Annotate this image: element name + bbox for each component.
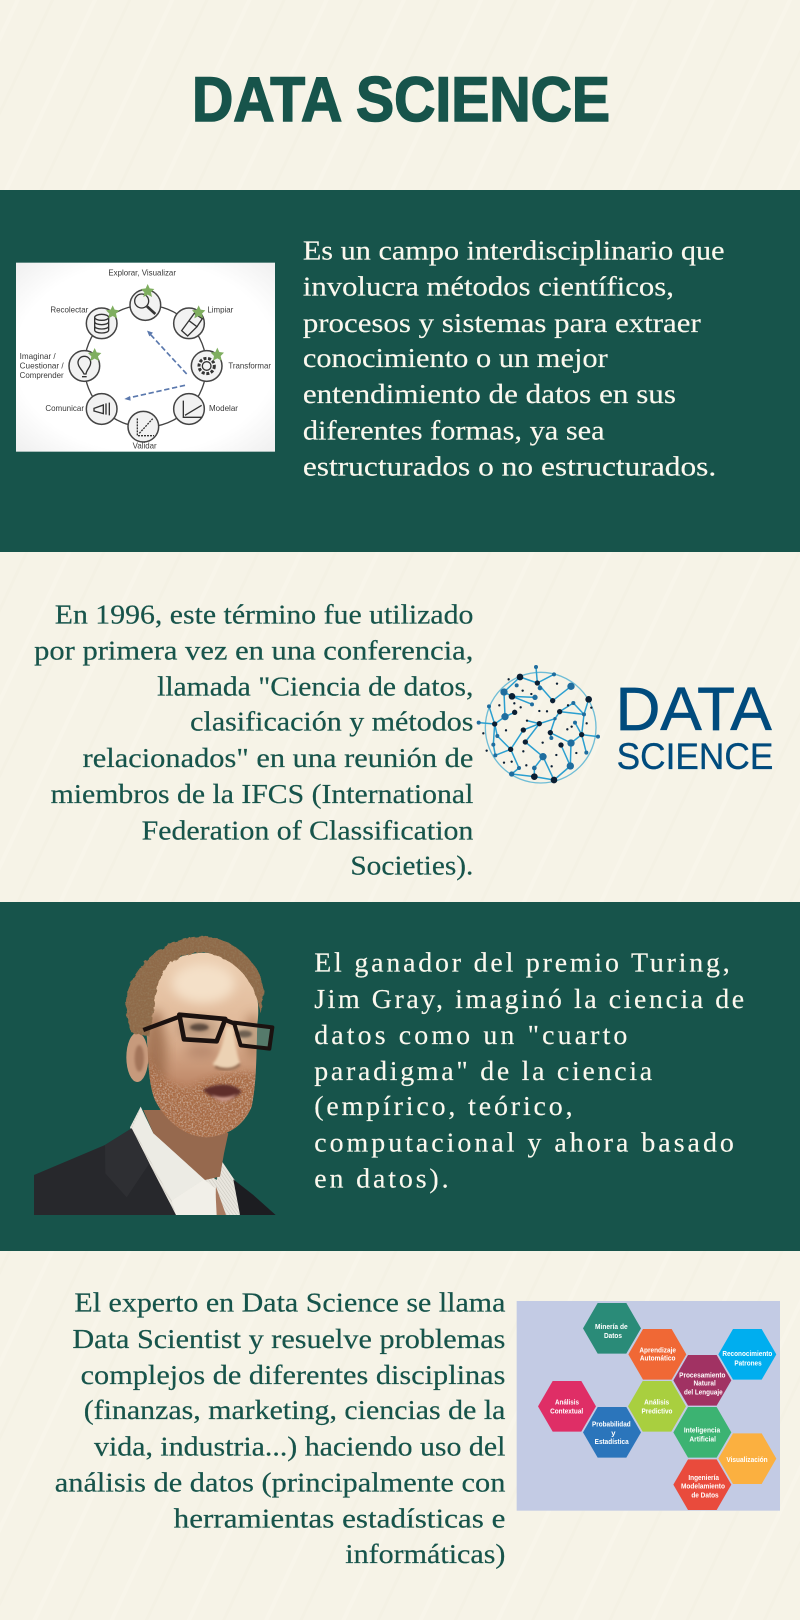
definition text [303, 235, 725, 482]
title: DATA SCIENCE [192, 65, 610, 135]
Jim Gray text: Jim Gray, imaginó la ciencia de [314, 984, 744, 1015]
hair [126, 936, 264, 1037]
definition text: conocimiento o un mejor [303, 343, 609, 374]
hexagon: Visualización [718, 1433, 776, 1484]
Jim Gray text: (empírico, teórico, [314, 1091, 573, 1122]
data scientist text: complejos de diferentes disciplinas [81, 1360, 505, 1391]
hexagon: Ingeniería Modelamiento de Datos: de Datos [691, 1490, 719, 1499]
Jim Gray text: datos como un "cuarto [314, 1020, 627, 1051]
panel: history [34, 599, 773, 881]
neck [143, 1110, 228, 1180]
hexagon: Probabilidad y Estadística: y [611, 1429, 616, 1438]
figure: disciplines hexagons [517, 1301, 780, 1511]
hexagon: Análisis Contextual: Contextual [550, 1407, 583, 1416]
cycle labels: Explorar, Visualizar [108, 268, 176, 277]
collar [133, 1109, 204, 1201]
hexagon: Procesamiento Natural del Lenguaje: del Lenguaje [684, 1387, 723, 1396]
hexagon: Probabilidad y Estadística: Estadística [595, 1437, 629, 1446]
data scientist text: herramientas estadísticas e [174, 1504, 505, 1535]
facial shading [143, 963, 262, 1097]
figure: data science cycle [16, 263, 275, 452]
history text: Federation of Classification [142, 815, 473, 846]
mouth [203, 1085, 242, 1100]
ear [126, 1033, 148, 1082]
data scientist text [55, 1288, 506, 1570]
green stars [88, 284, 224, 361]
cycle labels: Imaginar / [20, 352, 57, 361]
data scientist text: Data Scientist y resuelve problemas [72, 1324, 505, 1355]
hexagon: Minería de Datos: Minería de [595, 1322, 628, 1331]
hexagon: Probabilidad y Estadística: Probabilidad [592, 1420, 631, 1429]
Jim Gray text [314, 948, 744, 1195]
logo wordmark: SCIENCE [617, 735, 773, 777]
dashed arrows [128, 334, 187, 398]
cycle labels [20, 268, 271, 450]
cycle labels: Comprender [20, 371, 64, 380]
data scientist text: informáticas) [345, 1539, 505, 1570]
hexagon: Ingeniería Modelamiento de Datos: Modelamiento [681, 1482, 725, 1491]
hexagon: Inteligencia Artificial: Inteligencia [684, 1425, 721, 1434]
history text: clasificación y métodos [190, 707, 473, 738]
hexagon: Procesamiento Natural del Lenguaje: Natural [693, 1379, 716, 1388]
nose [213, 1027, 240, 1069]
hexagon: Análisis Predictivo [628, 1381, 686, 1432]
hexagon: Reconocimiento Patrones [718, 1329, 776, 1380]
hexagon: Ingeniería Modelamiento de Datos: Ingeniería [688, 1473, 720, 1482]
data scientist text: vida, industria...) haciendo uso del [94, 1431, 506, 1462]
panel: definition [0, 190, 800, 552]
portrait of Jim Gray [34, 936, 276, 1215]
Jim Gray text: El ganador del premio Turing, [314, 948, 730, 979]
history text [34, 599, 474, 881]
panel: Jim Gray [0, 902, 800, 1251]
hexagon: Reconocimiento Patrones: Patrones [734, 1358, 762, 1367]
Jim Gray text: paradigma" de la ciencia [314, 1056, 652, 1087]
hexagon: Visualización: Visualización [726, 1455, 768, 1464]
logo wordmark [616, 675, 773, 777]
definition text: involucra métodos científicos, [303, 272, 674, 303]
hexagon: Ingeniería Modelamiento de Datos [673, 1459, 731, 1510]
hexagon: Minería de Datos: Datos [604, 1331, 622, 1340]
hexagon: Aprendizaje Automático: Automático [640, 1354, 676, 1363]
data scientist text: El experto en Data Science se llama [74, 1288, 505, 1319]
hexagon: Inteligencia Artificial: Artificial [689, 1435, 716, 1444]
hexagon: Análisis Contextual: Análisis [555, 1398, 579, 1407]
hexagon: Minería de Datos [583, 1303, 641, 1354]
definition text: procesos y sistemas para extraer [303, 308, 702, 339]
Jim Gray text: computacional y ahora basado [314, 1127, 734, 1158]
hexagon: Aprendizaje Automático: Aprendizaje [639, 1346, 676, 1355]
cycle labels: Transformar [228, 361, 271, 370]
hexagon: Procesamiento Natural del Lenguaje [673, 1355, 731, 1406]
cycle labels: Comunicar [45, 404, 84, 413]
cycle labels: Recolectar [50, 305, 89, 314]
history text: miembros de la IFCS (International [51, 779, 474, 810]
Jim Gray text: en datos). [314, 1164, 449, 1195]
definition text: entendimiento de datos en sus [303, 379, 676, 410]
beard [148, 1062, 256, 1138]
eyes [190, 1024, 252, 1038]
glasses [143, 1015, 272, 1049]
logo: data science [477, 665, 773, 783]
data scientist text: (finanzas, marketing, ciencias de la [84, 1395, 505, 1426]
jacket [34, 1128, 176, 1215]
cycle labels: Limpiar [207, 305, 234, 314]
data scientist text: análisis de datos (principalmente con [55, 1467, 505, 1498]
shirt base [130, 1107, 242, 1215]
cycle labels: Validar [133, 441, 157, 450]
history text: por primera vez en una conferencia, [34, 635, 473, 666]
network globe [477, 665, 600, 783]
logo wordmark: DATA [616, 675, 772, 743]
history text: Societies). [350, 850, 473, 881]
hexagon: Aprendizaje Automático [628, 1329, 686, 1380]
history text: llamada "Ciencia de datos, [157, 672, 473, 703]
hexagon: Probabilidad y Estadística [583, 1407, 641, 1458]
definition text: estructurados o no estructurados. [303, 451, 716, 482]
definition text: Es un campo interdisciplinario que [303, 235, 725, 266]
panel: data scientist [55, 1288, 780, 1570]
hexagon: Procesamiento Natural del Lenguaje: Procesamiento [679, 1370, 726, 1379]
icons inside the cycle [78, 294, 214, 436]
hexagon: Análisis Predictivo: Predictivo [641, 1407, 673, 1416]
hexagon: Análisis Predictivo: Análisis [644, 1398, 669, 1407]
definition text: diferentes formas, ya sea [303, 415, 605, 446]
hexagon: Inteligencia Artificial [673, 1407, 731, 1458]
face [147, 953, 258, 1137]
cycle labels: Cuestionar / [20, 362, 65, 371]
history text: relacionados" en una reunión de [83, 743, 473, 774]
hexagon: Análisis Contextual [538, 1381, 596, 1432]
history text: En 1996, este término fue utilizado [55, 599, 473, 630]
cycle labels: Modelar [209, 404, 238, 413]
hexagon: Reconocimiento Patrones: Reconocimiento [722, 1349, 773, 1358]
